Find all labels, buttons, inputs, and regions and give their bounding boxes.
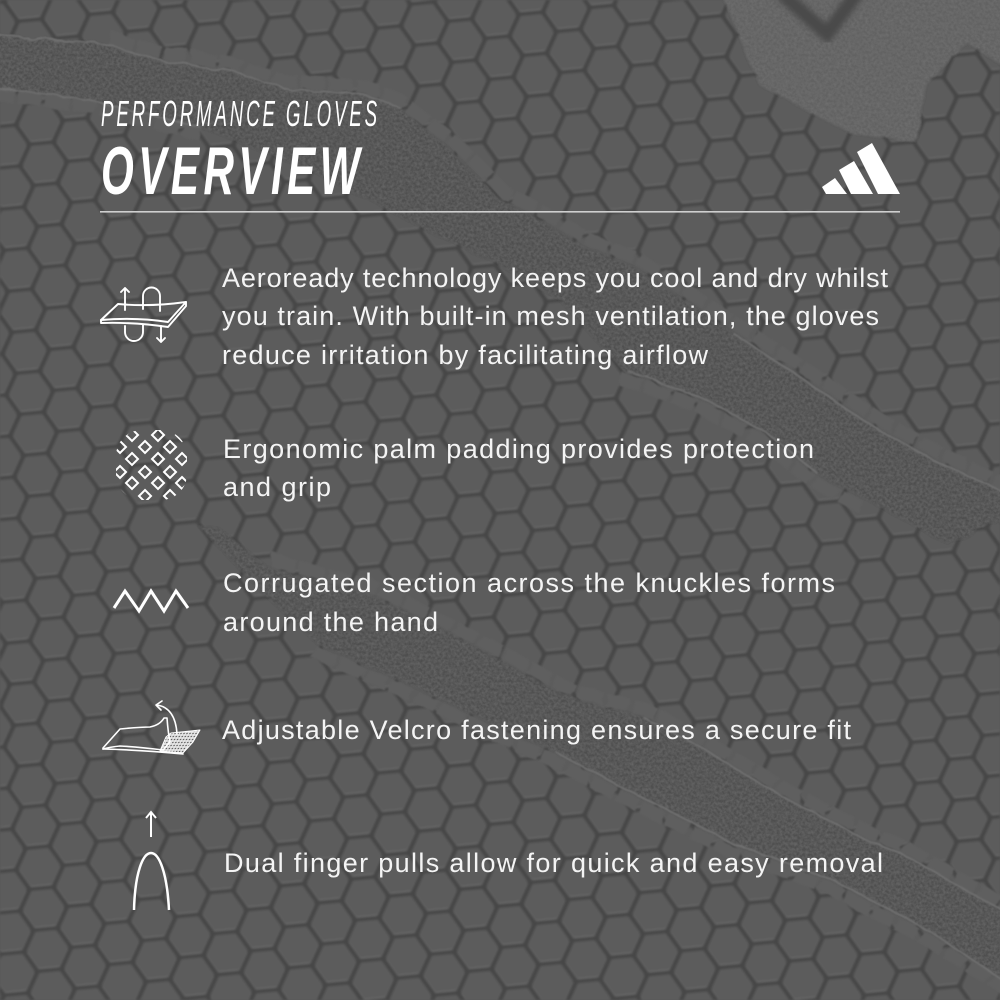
heading: overview: OVERVIEW	[101, 133, 363, 208]
text: dual finger pulls: Dual finger pulls allow for quick and easy removal	[224, 848, 883, 878]
divider	[100, 211, 900, 213]
icon: adidas logo	[822, 143, 900, 194]
text: aeroready: Aeroready technology keeps you cool and dry whilst	[222, 263, 888, 293]
icon: velcro fastening	[103, 701, 200, 754]
text: ergonomic palm: Ergonomic palm padding provides protection	[223, 434, 814, 464]
text: corrugated section: Corrugated section across the knuckles forms	[223, 568, 835, 598]
title	[101, 95, 377, 208]
subtitle: performance gloves: PERFORMANCE GLOVES	[101, 95, 377, 135]
text: aeroready	[222, 263, 888, 370]
text: ergonomic palm: and grip	[223, 472, 331, 502]
icon: breathable fabric airflow	[101, 288, 186, 342]
text: corrugated section	[223, 568, 835, 637]
suede panel, top right	[720, 0, 1000, 143]
text: corrugated section: around the hand	[223, 607, 438, 637]
text: ergonomic palm	[223, 434, 814, 502]
text: aeroready: you train. With built-in mesh ventilation, the gloves	[222, 301, 879, 331]
text: adjustable velcro: Adjustable Velcro fastening ensures a secure fit	[222, 715, 851, 745]
upper diagonal channel	[0, 34, 1000, 545]
text: aeroready: reduce irritation by facilitating airflow	[222, 340, 708, 370]
icon: palm padding diamonds	[114, 429, 188, 502]
lower diagonal channel	[200, 527, 1000, 985]
icon: corrugated zigzag	[114, 591, 188, 611]
icon: finger pull	[134, 812, 169, 910]
dark seam, top right	[780, 0, 858, 34]
